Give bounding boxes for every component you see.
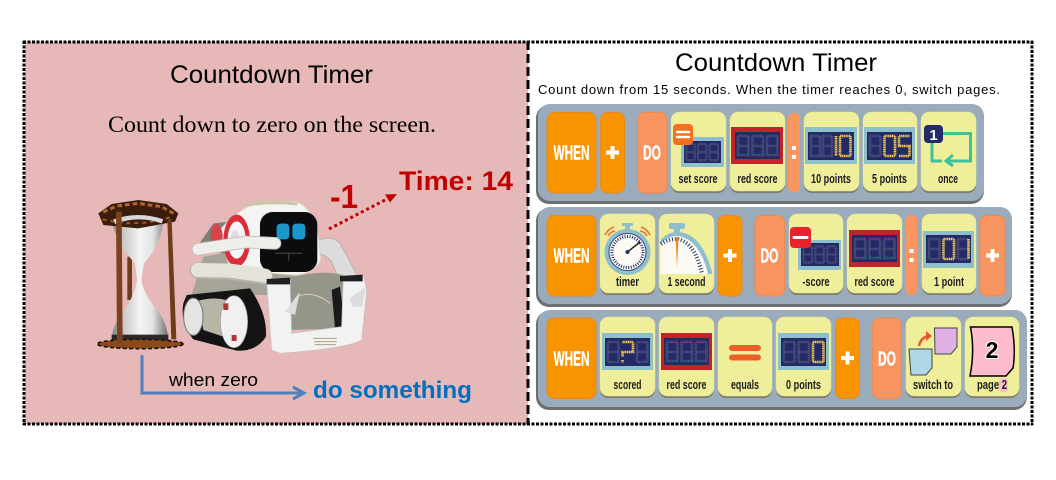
block: 1 point: 1 point — [934, 274, 964, 289]
block: colon — [906, 215, 917, 295]
block: plus — [836, 318, 860, 398]
block: DO — [872, 318, 902, 398]
block: scored — [600, 317, 655, 398]
when zero label: when zero — [168, 370, 258, 390]
block: WHEN — [547, 216, 596, 296]
dotted outer frame — [23, 41, 1033, 425]
block: 10 points: 10 points — [811, 171, 851, 186]
icon: hourglass — [97, 200, 183, 349]
block: 1 second — [659, 214, 714, 295]
block: 0 points: 0 points — [786, 377, 821, 392]
block: WHEN: WHEN — [554, 348, 590, 370]
block: equals: equals — [731, 377, 759, 392]
arrow: when zero — [142, 355, 304, 399]
block: WHEN: WHEN — [554, 246, 590, 268]
block: orange plus — [980, 216, 1005, 296]
right panel title: Countdown Timer — [675, 49, 877, 77]
minus one label: -1 — [330, 178, 358, 215]
block: once: once — [938, 171, 958, 186]
block: WHEN: WHEN — [554, 142, 590, 164]
block: red score: red score — [854, 274, 894, 289]
block: plus — [718, 216, 742, 296]
block: 5 points — [863, 112, 917, 193]
left panel title: Countdown Timer — [170, 61, 373, 89]
block: 5 points: 5 points — [872, 171, 907, 186]
panel: left concept panel — [25, 42, 528, 424]
block: WHEN — [547, 112, 596, 193]
block: colon — [788, 113, 800, 192]
block: page 2: page 2 — [977, 377, 1007, 392]
block: 1 second: 1 second — [668, 274, 706, 289]
block: WHEN — [547, 318, 596, 398]
block: plus — [600, 112, 624, 193]
time readout: Time: 14 — [399, 166, 513, 196]
left panel description: Count down to zero on the screen. — [108, 112, 436, 137]
block: DO: DO — [760, 246, 778, 268]
block: red score — [730, 112, 785, 193]
block: switch to: switch to — [913, 377, 953, 392]
block: scored: scored — [614, 377, 642, 392]
block: timer: timer — [616, 274, 639, 289]
block: red score — [847, 214, 902, 295]
block: 10 points — [804, 112, 859, 193]
arrow: minus one to time — [329, 194, 397, 229]
panel: code row 1 — [536, 104, 984, 204]
block: DO — [755, 216, 784, 296]
panel: code row 2 — [536, 207, 1012, 307]
icon: Cozmo robot — [183, 201, 367, 353]
block: minus score — [789, 214, 843, 295]
block: once — [921, 112, 976, 193]
block: equals — [718, 317, 772, 398]
block: DO: DO — [643, 142, 661, 164]
panel: code row 3 — [536, 310, 1027, 410]
block: minus score: -score — [802, 274, 830, 289]
block: page 2: 2 — [986, 337, 998, 363]
block: red score — [659, 317, 714, 398]
block: DO — [638, 112, 667, 193]
block: red score: red score — [666, 377, 706, 392]
block: red score: red score — [738, 171, 778, 186]
block: once: 1 — [929, 127, 938, 144]
block: DO: DO — [878, 348, 896, 370]
robot eyes — [277, 224, 305, 239]
block: switch to — [906, 317, 961, 398]
block: timer — [600, 214, 655, 295]
block: 0 points — [776, 317, 831, 398]
block: set score: set score — [678, 171, 718, 186]
block: 1 point — [922, 214, 976, 295]
right panel description: Count down from 15 seconds. When the timer reaches 0, switch pages. — [538, 82, 1000, 97]
do something label: do something — [313, 377, 472, 404]
block: page 2 — [965, 317, 1019, 398]
block: set score — [671, 112, 726, 193]
